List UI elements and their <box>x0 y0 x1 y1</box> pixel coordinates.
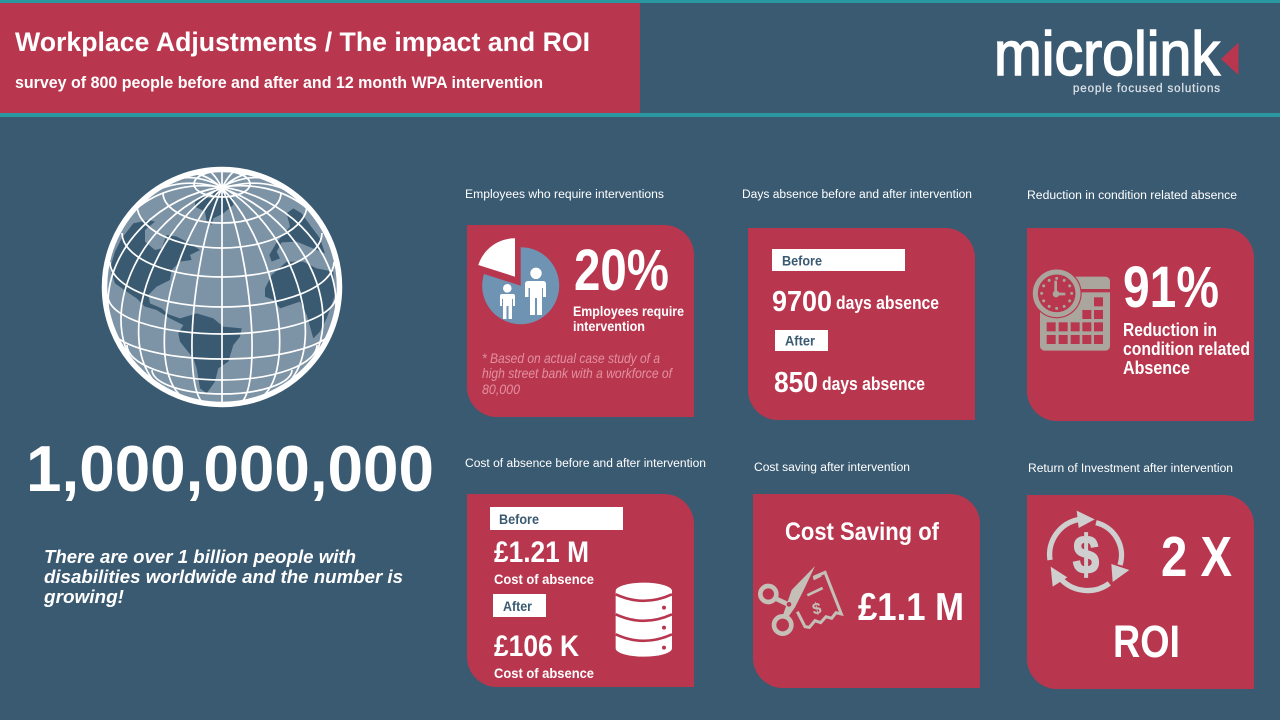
text block: billion people statement: There are over 1 billion people with <box>44 546 356 567</box>
label: after: After <box>503 598 532 614</box>
footnote: 80,000 <box>482 381 520 397</box>
label: after <box>493 594 546 617</box>
stat caption: Employees require <box>573 303 684 319</box>
stat: 20%: 20% <box>574 238 669 303</box>
panel heading: cost of absence: Cost of absence before and after intervention <box>465 458 706 470</box>
label: after: After <box>785 332 816 348</box>
icon: calendar and clock <box>1032 268 1110 351</box>
stat caption: condition related <box>1123 339 1250 359</box>
panel heading: return on investment: Return of Investment after intervention <box>1028 463 1233 475</box>
panel heading: employees: Employees who require interventions <box>465 189 664 201</box>
icon: database <box>616 583 672 657</box>
stat: £1.1 M: £1.1 M <box>858 586 964 629</box>
icon: scissors and receipt: $ <box>811 600 823 619</box>
stat: 850 days: 850 <box>774 367 818 399</box>
stat: cost before: Cost of absence <box>494 571 594 587</box>
stat caption: Reduction in <box>1123 320 1217 340</box>
icon: dollar with cycle arrows: $ <box>1073 526 1099 585</box>
logo: microlink: microlink <box>994 20 1221 89</box>
stat: cost after <box>494 630 594 681</box>
text block: billion people statement: growing! <box>43 586 124 607</box>
big number: 1,000,000,000 <box>26 432 434 505</box>
header banner <box>0 3 640 113</box>
panel: reduction in absence <box>1027 228 1254 421</box>
label: before <box>772 249 905 271</box>
panel: days absence <box>748 228 975 420</box>
stat: 9700 days <box>772 286 939 318</box>
stat: 2 X: 2 X <box>1161 525 1232 589</box>
footnote: high street bank with a workforce of <box>482 365 674 381</box>
stat caption: Absence <box>1123 358 1190 378</box>
panel heading: cost saving: Cost saving after intervention <box>754 462 910 474</box>
panel: employees require intervention <box>467 225 694 417</box>
stat: 850 days: days absence <box>822 374 925 394</box>
label: before: Before <box>782 252 822 268</box>
icon: scissors and receipt <box>760 566 841 634</box>
icon: globe <box>104 169 340 405</box>
stat: cost before <box>494 536 594 587</box>
panel: cost saving <box>753 494 980 688</box>
panel heading: days absence: Days absence before and after intervention <box>742 189 972 201</box>
icon: pie with people <box>478 238 559 324</box>
stat caption <box>573 303 684 334</box>
stat: cost after: Cost of absence <box>494 665 594 681</box>
subtitle: survey of 800 people before and after and 12 month WPA intervention <box>15 74 543 92</box>
footnote <box>482 350 674 397</box>
icon: dollar with cycle arrows <box>1050 511 1129 591</box>
stat caption: intervention <box>573 318 645 334</box>
stat caption <box>1123 320 1250 378</box>
stat: 850 days <box>774 367 925 399</box>
footnote: * Based on actual case study of a <box>482 350 660 366</box>
panel: return on investment <box>1027 495 1254 689</box>
panel: cost of absence <box>467 494 694 687</box>
text block: billion people statement: disabilities worldwide and the number is <box>44 566 403 587</box>
stat: 9700 days: 9700 <box>772 286 832 318</box>
text block: billion people statement <box>43 546 403 607</box>
label: before <box>490 507 623 530</box>
label: before: Before <box>499 511 539 527</box>
label: after <box>775 330 828 351</box>
panel heading: reduction: Reduction in condition related absence <box>1027 190 1237 202</box>
panel title: cost saving of: Cost Saving of <box>785 518 940 546</box>
stat caption: ROI: ROI <box>1113 616 1180 667</box>
stat: cost before: £1.21 M <box>494 536 589 569</box>
stat: cost after: £106 K <box>494 630 579 663</box>
stat: 9700 days: days absence <box>836 293 939 313</box>
logo: microlink: people focused solutions <box>1073 83 1220 95</box>
stat: 91%: 91% <box>1123 255 1219 320</box>
title: Workplace Adjustments / The impact and ROI <box>15 27 590 57</box>
